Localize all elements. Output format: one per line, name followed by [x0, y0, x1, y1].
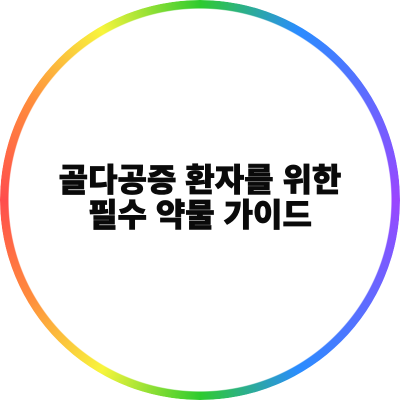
- title: [59, 162, 341, 233]
- title: 골다공증 환자를 위한: [59, 162, 341, 198]
- title: 필수 약물 가이드: [88, 197, 312, 233]
